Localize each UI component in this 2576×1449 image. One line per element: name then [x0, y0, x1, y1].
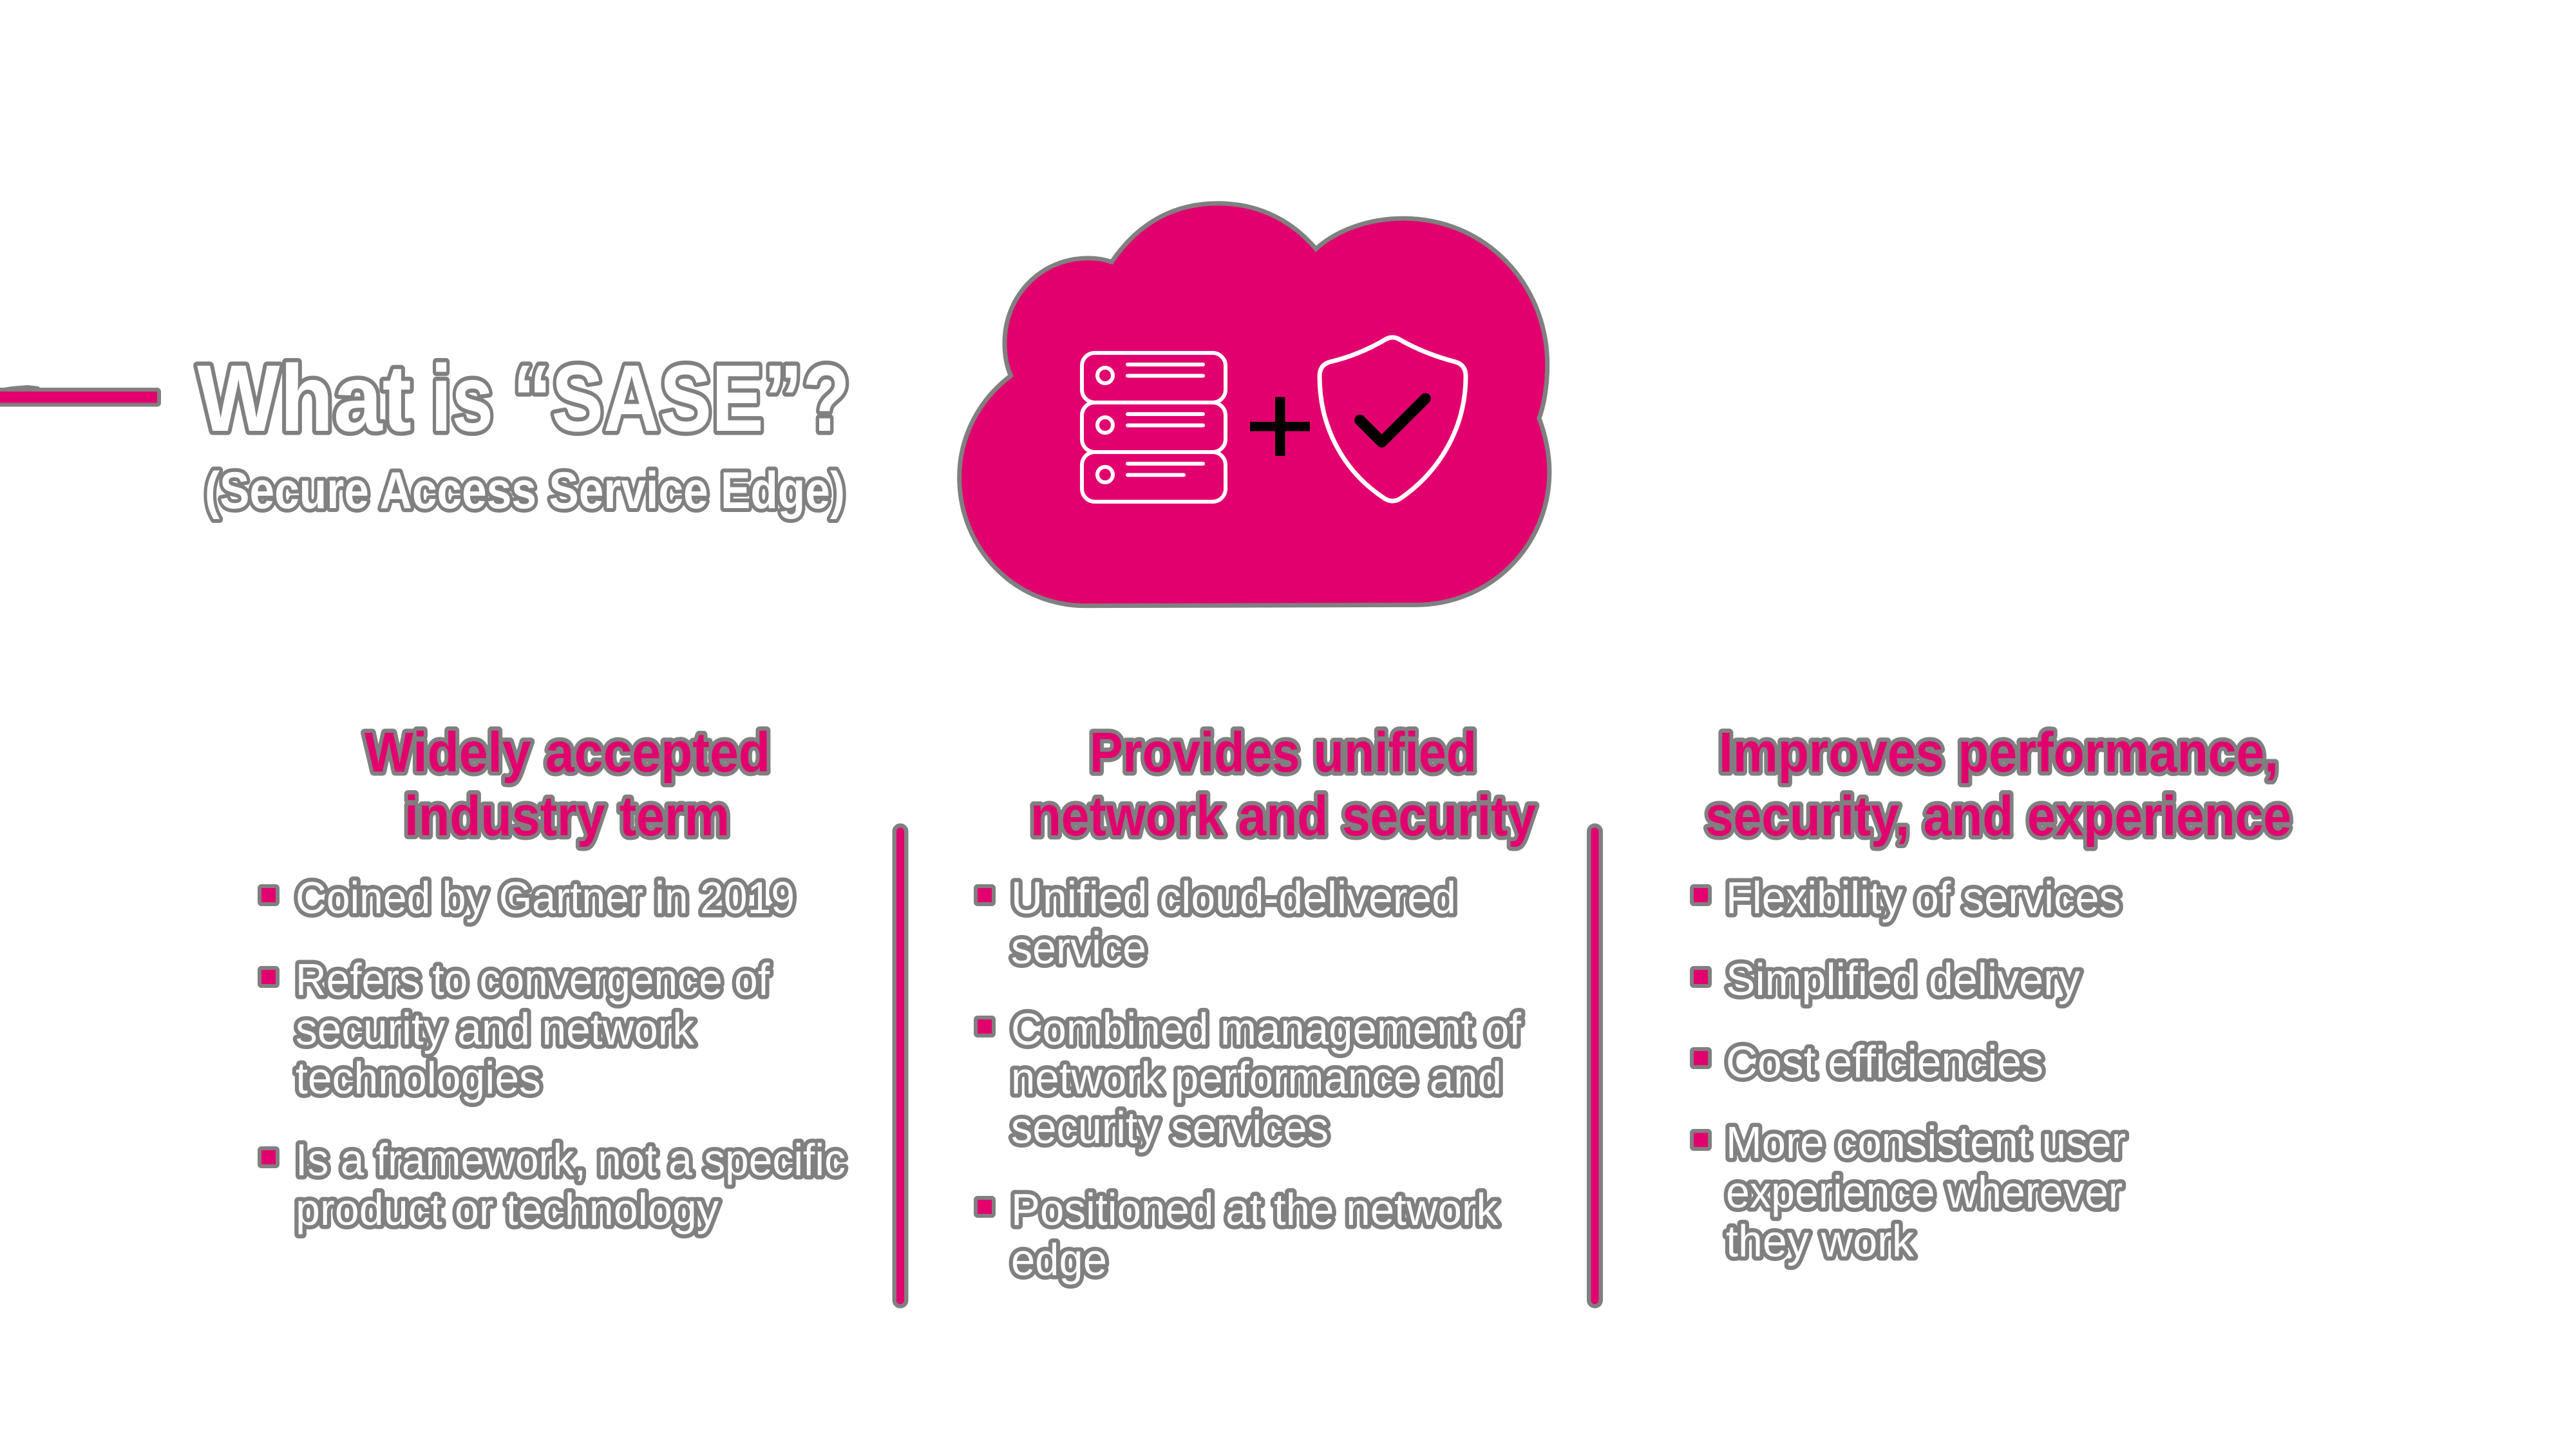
bullet marker [261, 970, 276, 984]
bullet text: Refers to convergence of [296, 954, 770, 1005]
bullet marker [978, 1200, 992, 1214]
bullet text: Cost efficiencies [1726, 1037, 2043, 1087]
bullet text: Unified cloud-delivered [1011, 873, 1456, 923]
panel: improves performance, security, and experience [1694, 721, 2291, 1266]
bullet text: Flexibility of services [1726, 873, 2121, 923]
panel: widely accepted industry term [261, 721, 846, 1235]
title: “SASE”? [513, 346, 850, 451]
heading line 2: network and security [1030, 785, 1536, 848]
bullet text [1011, 1184, 1499, 1285]
icon: plus sign [1250, 397, 1310, 456]
bullet marker [1694, 970, 1708, 984]
divider 2 [1591, 828, 1598, 1304]
icon: shield [1320, 337, 1466, 501]
bullet text [296, 954, 770, 1103]
title [197, 346, 850, 451]
bullet text: More consistent user [1726, 1117, 2126, 1168]
bullet text [296, 1135, 846, 1235]
bullet text: Simplified delivery [1726, 954, 2080, 1005]
heading line 2: industry term [404, 785, 730, 848]
bullet text: network performance and [1011, 1053, 1502, 1103]
bullet text: service [1011, 923, 1146, 973]
heading line 2: security, and experience [1705, 785, 2291, 848]
bullet text: Is a framework, not a specific [296, 1135, 846, 1185]
icon: cloud with server and shield [960, 204, 1549, 606]
bullet text [1011, 1004, 1522, 1153]
bullet text: Positioned at the network [1011, 1184, 1499, 1235]
bullet marker [978, 888, 992, 902]
heading: Widely accepted [365, 721, 770, 784]
bullet text: security services [1011, 1103, 1329, 1153]
icon: check mark [1360, 399, 1425, 442]
bullet text: they work [1726, 1216, 1915, 1266]
accent bar left of title [0, 385, 157, 403]
heading: Provides unified [1090, 721, 1477, 784]
title: What [197, 346, 412, 451]
panel: provides unified network and security [978, 721, 1536, 1285]
cloud shape [960, 204, 1549, 606]
bullet marker [978, 1019, 992, 1034]
bullet marker [1694, 1051, 1708, 1065]
bullet marker [1694, 1133, 1708, 1147]
bullet text [1011, 873, 1456, 973]
bullet text: product or technology [296, 1184, 719, 1235]
bullet marker [261, 888, 276, 902]
bullet text: technologies [296, 1053, 541, 1103]
subtitle: (Secure Access Service Edge) [205, 462, 845, 520]
title: is [431, 346, 493, 451]
bullet text: Coined by Gartner in 2019 [296, 873, 795, 923]
bullet text: Combined management of [1011, 1004, 1522, 1054]
bullet text: security and network [296, 1004, 695, 1054]
bullet text: edge [1011, 1235, 1107, 1285]
icon: server stack [1082, 353, 1226, 502]
bullet marker [1694, 888, 1708, 902]
bullet text [1726, 1117, 2126, 1266]
divider 1 [896, 828, 904, 1304]
bullet marker [261, 1150, 276, 1164]
bullet text: experience wherever [1726, 1167, 2123, 1217]
heading: Improves performance, [1719, 721, 2278, 784]
